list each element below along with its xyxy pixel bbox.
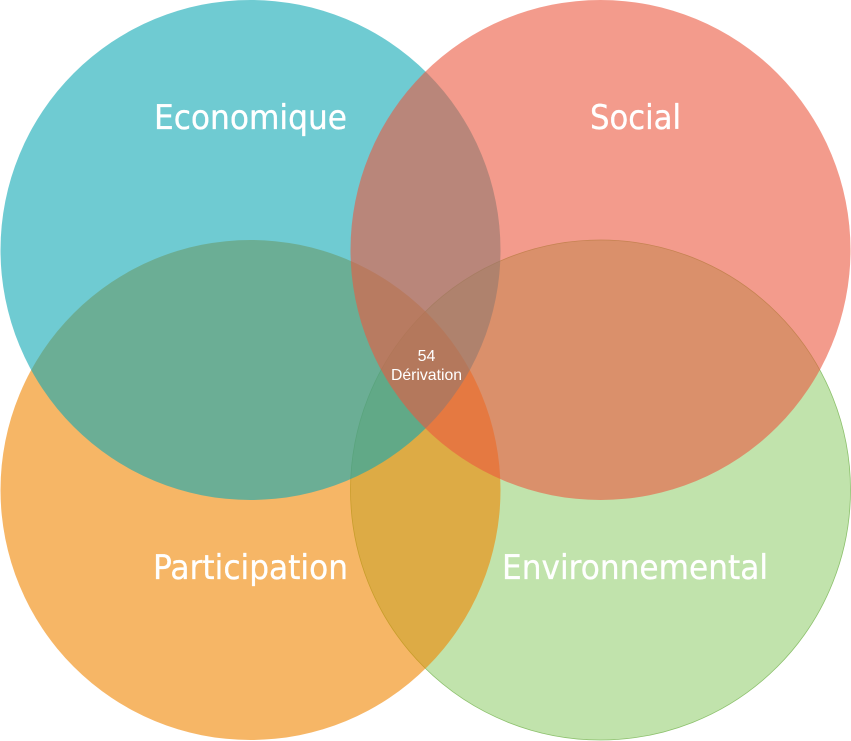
circle: environnemental xyxy=(350,240,850,740)
center label: 54 Dérivation: 54 xyxy=(418,348,436,365)
label: Environnemental: Environnemental xyxy=(502,548,768,588)
label: Economique: Economique xyxy=(154,98,347,138)
label: Participation: Participation xyxy=(153,548,348,588)
label: Social: Social xyxy=(590,98,681,138)
circle: participation xyxy=(0,240,500,740)
circle: economique xyxy=(0,0,500,500)
center label: 54 Dérivation xyxy=(391,348,462,384)
center label: 54 Dérivation: Dérivation xyxy=(391,367,462,384)
circle: social xyxy=(350,0,850,500)
